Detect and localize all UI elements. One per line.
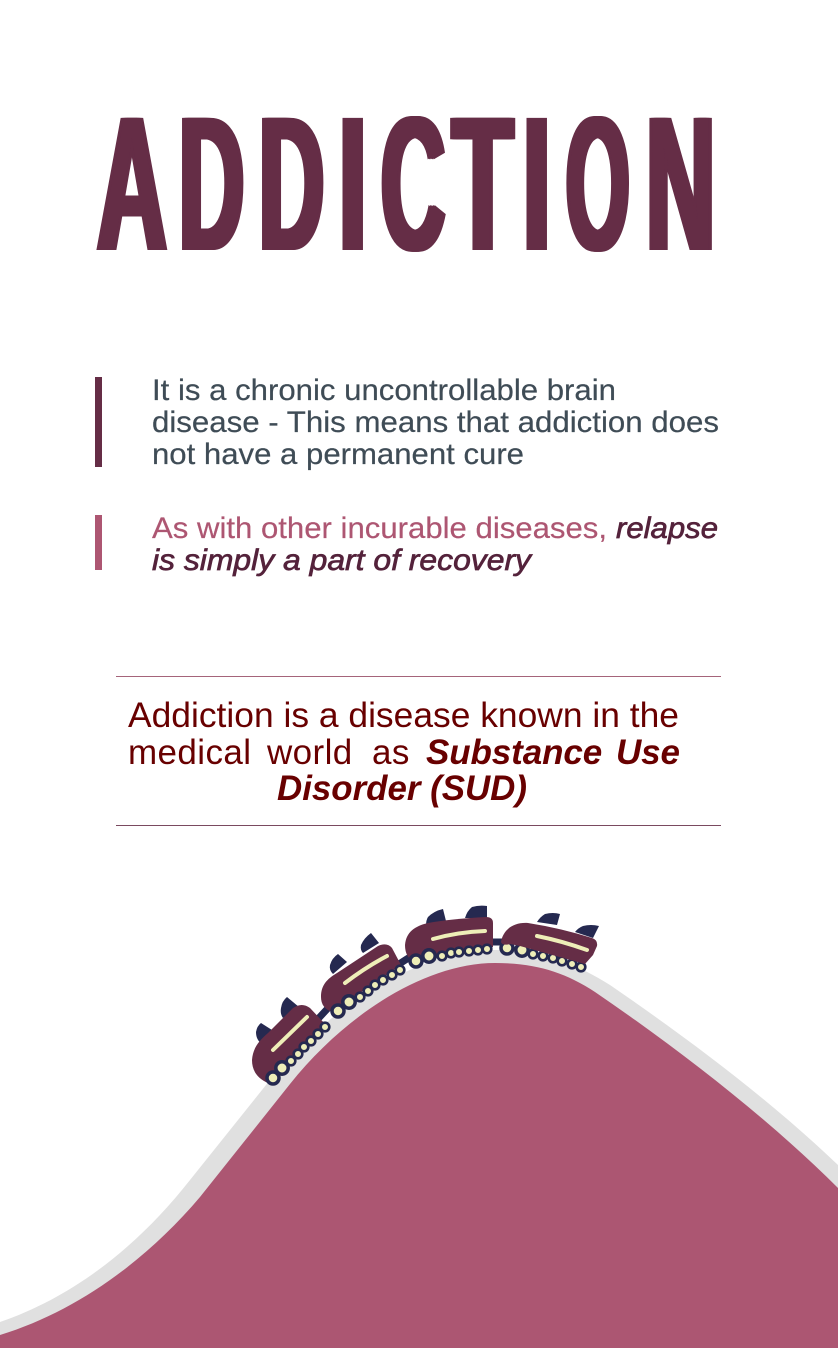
title: N xyxy=(646,76,715,291)
callout: substance use disorder: Addiction is a disease known in the xyxy=(128,696,679,735)
top divider rule xyxy=(116,676,721,677)
callout: substance use disorder: as xyxy=(372,733,410,772)
title: D xyxy=(179,76,244,291)
hill shadow band xyxy=(0,950,838,1348)
roller coaster train xyxy=(252,906,599,1084)
coaster car 2 xyxy=(321,933,404,1017)
callout: substance use disorder: Use xyxy=(616,733,680,772)
coaster car 4 xyxy=(501,913,599,971)
accent bar: first statement xyxy=(95,377,102,467)
coaster car 3 xyxy=(405,906,493,967)
callout: substance use disorder: medical xyxy=(128,733,251,772)
bottom divider rule xyxy=(116,825,721,826)
title: I xyxy=(333,76,372,291)
title: A xyxy=(97,76,167,291)
callout: substance use disorder: Substance xyxy=(426,733,602,772)
text block: relapse: As with other incurable diseases, xyxy=(152,512,607,545)
accent bar: second statement xyxy=(95,515,102,570)
text block: relapse: is simply a part of recovery xyxy=(152,544,533,577)
text block: chronic disease: not have a permanent cure xyxy=(152,438,524,471)
text block: relapse xyxy=(152,512,718,577)
text block: chronic disease: It is a chronic uncontrollable brain xyxy=(152,374,616,407)
title: D xyxy=(259,76,324,291)
callout: substance use disorder: Disorder (SUD) xyxy=(277,769,527,808)
text block: chronic disease xyxy=(152,374,719,471)
title: I xyxy=(517,76,556,291)
text block: relapse: relapse xyxy=(616,512,718,545)
track couplings xyxy=(317,942,506,1020)
callout: substance use disorder xyxy=(128,696,680,808)
hill xyxy=(0,963,838,1348)
text block: chronic disease: disease - This means that addiction does xyxy=(152,406,719,439)
callout: substance use disorder: world xyxy=(266,733,353,772)
coaster car 1 xyxy=(252,997,329,1084)
title: O xyxy=(566,76,629,291)
title: T xyxy=(452,76,513,291)
title xyxy=(96,76,715,291)
title: C xyxy=(381,76,445,291)
